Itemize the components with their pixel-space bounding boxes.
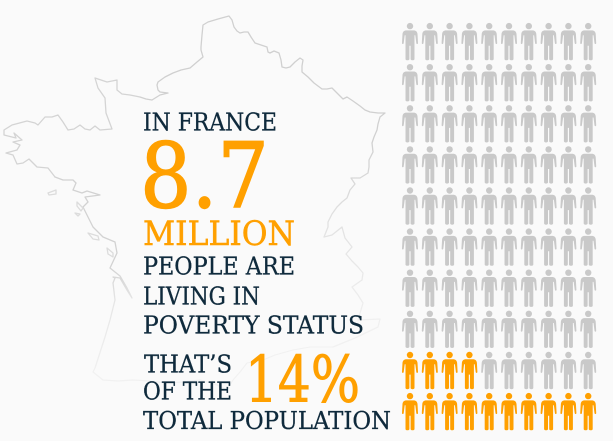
highlighted orange people <box>402 352 596 430</box>
islands <box>48 190 113 257</box>
big number: 14%: 14% <box>245 344 360 418</box>
text: living in: LIVING IN <box>143 282 260 310</box>
text: that's: THAT’S <box>144 351 232 379</box>
heading: in France: IN FRANCE <box>143 109 277 137</box>
label: million: MILLION <box>143 214 295 254</box>
text: poverty status: POVERTY STATUS <box>143 312 364 340</box>
text: of the: OF THE <box>143 378 232 406</box>
text: people are: PEOPLE ARE <box>143 252 295 280</box>
rows of grey people <box>402 23 596 389</box>
big number: 8.7: 8.7 <box>140 124 269 229</box>
map outline of France <box>4 16 385 390</box>
text: total population: TOTAL POPULATION <box>143 407 391 435</box>
pictogram grid: 100 people, 14 highlighted <box>402 23 596 430</box>
